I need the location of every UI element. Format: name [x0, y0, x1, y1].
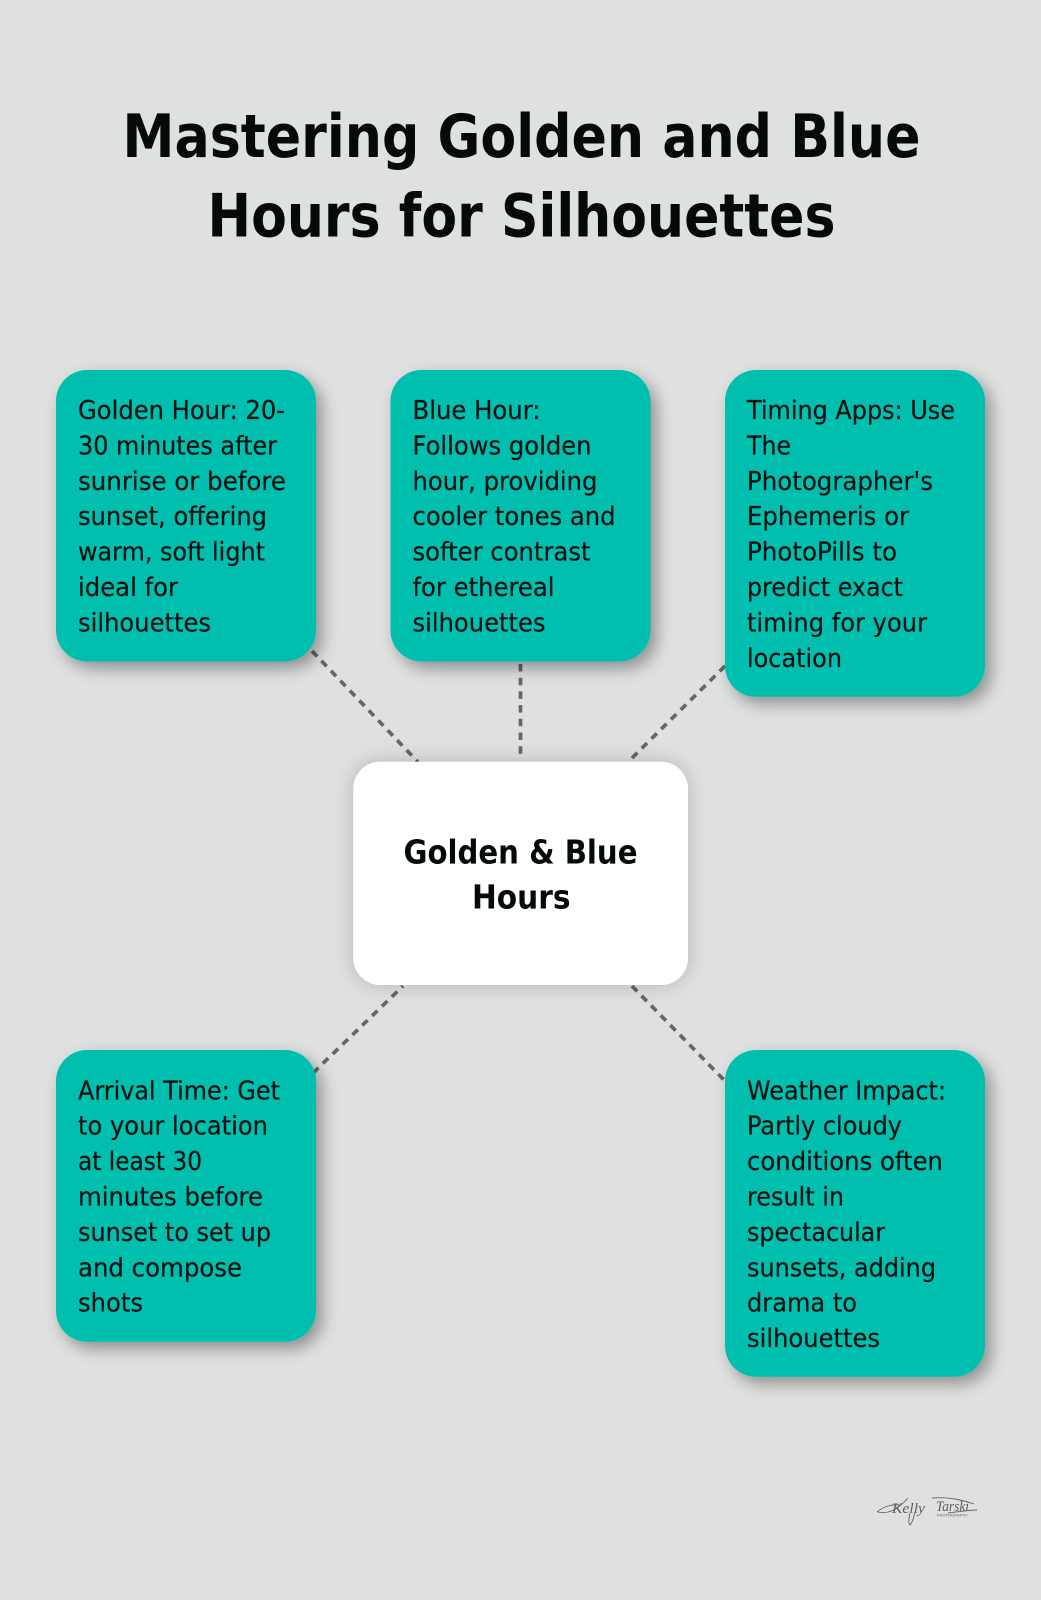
title: Hours for Silhouettes: [208, 182, 836, 252]
center heading: Hours: [472, 877, 570, 916]
text: arrival time: shots: [78, 1289, 143, 1319]
text: weather impact: silhouettes: [747, 1324, 880, 1354]
text: golden hour: silhouettes: [78, 608, 211, 638]
text: weather impact: result in: [747, 1182, 844, 1212]
text: blue hour: silhouettes: [412, 608, 546, 638]
logo: signature: PHOTOGRAPHY: [937, 1514, 969, 1518]
text: arrival time: minutes before: [78, 1182, 263, 1212]
panel: timing apps: [725, 370, 985, 697]
text: weather impact: conditions often: [747, 1147, 943, 1177]
text: weather impact: sunsets, adding: [747, 1253, 936, 1283]
connector lines: [312, 651, 725, 1081]
center heading: Golden & Blue: [404, 832, 638, 871]
text: weather impact: drama to: [747, 1289, 857, 1319]
logo: signature: Kelly: [891, 1501, 925, 1517]
text: timing apps: [746, 396, 955, 674]
text: golden hour: 30 minutes after: [78, 431, 277, 461]
text: blue hour: hour, providing: [412, 467, 598, 497]
text: arrival time: at least 30: [78, 1147, 202, 1177]
text: arrival time: [78, 1076, 280, 1319]
text: blue hour: cooler tones and: [412, 502, 616, 532]
title: Mastering Golden and Blue: [122, 102, 920, 172]
text: arrival time: and compose: [78, 1253, 242, 1283]
text: arrival time: Arrival Time: Get: [78, 1076, 280, 1106]
text: weather impact: [747, 1076, 946, 1354]
logo: signature: [877, 1498, 977, 1525]
panel: golden hour: [56, 370, 316, 662]
text: timing apps: location: [747, 644, 842, 674]
text: blue hour: Follows golden: [412, 431, 592, 461]
text: timing apps: Ephemeris or: [747, 502, 909, 532]
text: blue hour: [412, 396, 616, 638]
text: timing apps: timing for your: [747, 608, 927, 638]
text: golden hour: [78, 396, 286, 638]
text: golden hour: sunset, offering: [78, 502, 267, 532]
text: weather impact: Weather Impact:: [747, 1076, 946, 1106]
text: timing apps: Timing Apps: Use: [746, 396, 955, 426]
panel: weather impact: [725, 1050, 985, 1377]
text: weather impact: Partly cloudy: [747, 1112, 902, 1142]
text: golden hour: sunrise or before: [78, 467, 286, 497]
panel: arrival time: [56, 1050, 316, 1342]
title: [122, 102, 920, 252]
panel: blue hour: [390, 370, 650, 662]
text: timing apps: predict exact: [747, 573, 903, 603]
text: timing apps: Photographer's: [747, 467, 933, 497]
text: golden hour: warm, soft light: [78, 538, 265, 568]
text: timing apps: The: [746, 431, 791, 461]
center heading: [404, 832, 638, 916]
text: weather impact: spectacular: [747, 1218, 885, 1248]
text: blue hour: for ethereal: [412, 573, 554, 603]
text: arrival time: sunset to set up: [78, 1218, 271, 1248]
text: golden hour: ideal for: [78, 573, 178, 603]
text: golden hour: Golden Hour: 20-: [78, 396, 285, 426]
text: arrival time: to your location: [78, 1112, 268, 1142]
text: timing apps: PhotoPills to: [747, 538, 897, 568]
panel: center node: [353, 762, 688, 985]
text: blue hour: softer contrast: [412, 538, 590, 568]
text: blue hour: Blue Hour:: [412, 396, 540, 426]
logo: signature: Tarski: [936, 1499, 969, 1515]
